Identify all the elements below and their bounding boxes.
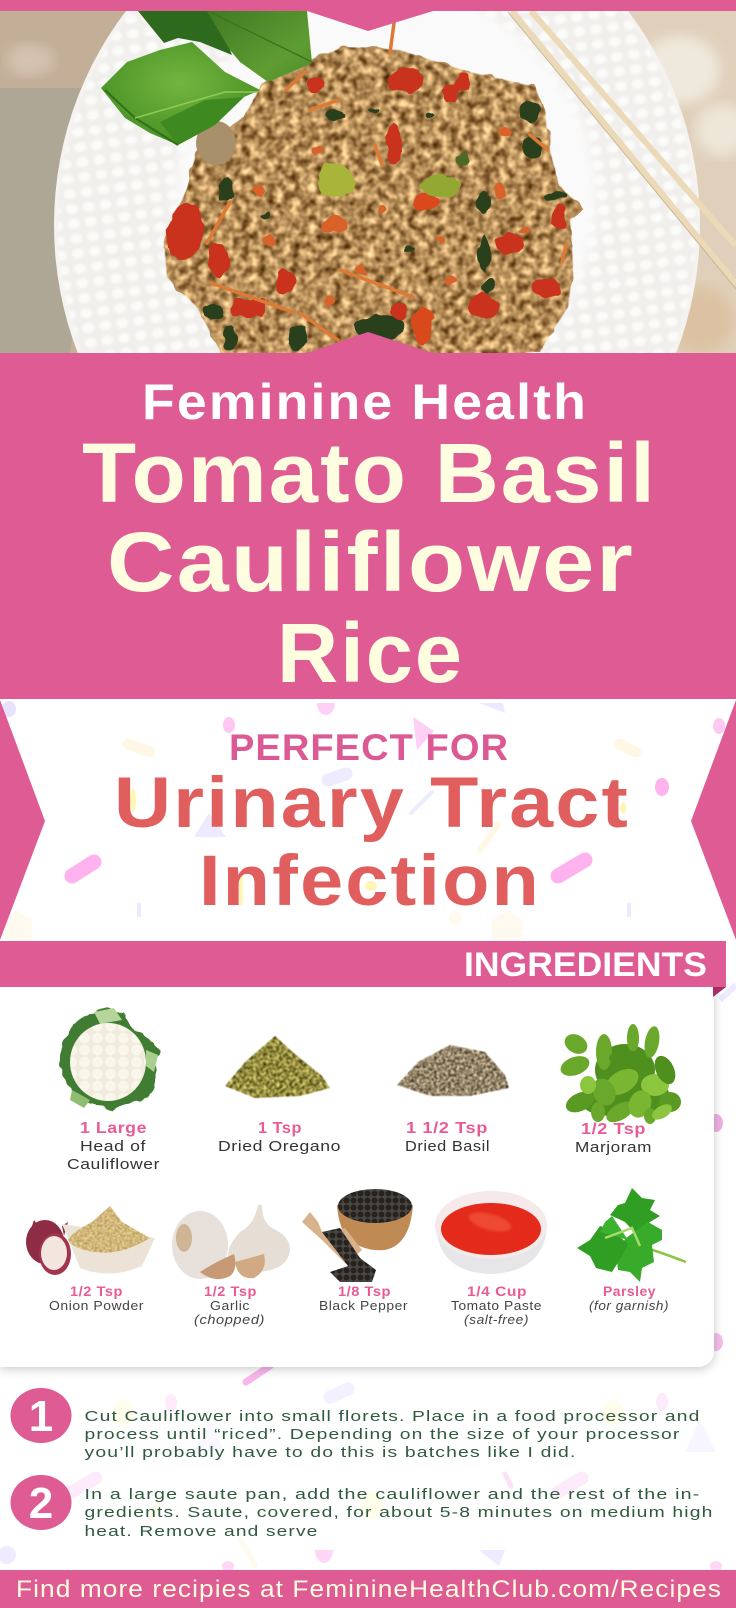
label: 1/2 Tsp marjoram	[575, 1121, 652, 1156]
confetti on right margin and lower section	[0, 985, 736, 1571]
ingredient: tomato paste	[435, 1191, 547, 1327]
banner heading: Urinary Tract Infection	[114, 764, 630, 921]
photo: tomato basil cauliflower rice on a white plate	[0, 11, 736, 353]
step 2 text	[84, 1486, 714, 1540]
ingredients header band	[0, 941, 726, 997]
right ribbon tail	[691, 700, 736, 940]
chopsticks	[508, 11, 736, 289]
heading: Ingredients: INGREDIENTS	[464, 946, 707, 984]
ingredients card	[0, 987, 714, 1367]
title: Tomato Basil Cauliflower Rice: Rice	[277, 606, 464, 700]
subtitle: Feminine Health: Feminine Health	[142, 374, 588, 430]
title: Tomato Basil Cauliflower Rice: Cauliflower	[107, 515, 635, 609]
icon: oregano pile	[225, 1036, 330, 1098]
label: 1 Large head of cauliflower	[67, 1120, 160, 1173]
step 2 text: In a large saute pan, add the cauliflower and the rest of the in-	[84, 1486, 700, 1503]
label: 1 1/2 Tsp dried basil	[405, 1120, 490, 1155]
title: Tomato Basil Cauliflower Rice: Tomato Basil	[82, 426, 657, 520]
label: 1/4 Cup tomato paste salt-free	[451, 1284, 542, 1327]
icon: cauliflower	[60, 1008, 158, 1112]
step 1	[10, 1388, 700, 1461]
footer text: Find more recipies at FeminineHealthClub.com/Recipes	[16, 1576, 722, 1603]
icon: garlic bulbs and cloves	[172, 1205, 290, 1279]
ingredient: dried oregano	[218, 1036, 341, 1155]
label: 1 Tsp dried oregano	[218, 1120, 341, 1155]
label: 1/2 Tsp garlic chopped: (chopped)	[194, 1313, 265, 1327]
label: 1 Tsp dried oregano: Dried Oregano	[218, 1138, 341, 1155]
ingredient: parsley	[577, 1188, 686, 1313]
rice mound	[161, 23, 582, 360]
label: 1/4 Cup tomato paste salt-free: Tomato Paste	[451, 1299, 542, 1313]
step 2 text: heat. Remove and serve	[84, 1523, 318, 1540]
label: 1/2 Tsp garlic chopped: 1/2 Tsp	[204, 1284, 257, 1299]
confetti background: upper section	[2, 701, 725, 940]
step 2 text: gredients. Saute, covered, for about 5-8 minutes on medium high	[84, 1504, 714, 1521]
label: 1 1/2 Tsp dried basil: Dried Basil	[405, 1138, 490, 1155]
basil leaves	[101, 11, 312, 145]
label: 1/2 Tsp onion powder: Onion Powder	[49, 1299, 144, 1313]
icon: parsley sprig	[577, 1188, 686, 1282]
step 1 text: you’ll probably have to do this is batches like I did.	[84, 1444, 576, 1461]
step 1 text: Cut Cauliflower into small florets. Place in a food processor and	[84, 1408, 700, 1425]
label: 1/2 Tsp garlic chopped: Garlic	[210, 1299, 250, 1313]
number badge 1: 1	[29, 1392, 53, 1441]
label: 1/8 Tsp black pepper: 1/8 Tsp	[338, 1284, 391, 1299]
label: 1/2 Tsp onion powder: 1/2 Tsp	[70, 1284, 123, 1299]
label: 1/2 Tsp marjoram: Marjoram	[575, 1139, 652, 1156]
number badge 1	[10, 1388, 72, 1443]
label: 1/4 Cup tomato paste salt-free: (salt-free)	[464, 1313, 529, 1327]
ingredient: marjoram	[558, 1024, 681, 1156]
footer band	[0, 1570, 736, 1608]
title panel	[0, 332, 736, 700]
label: 1 Large head of cauliflower: 1 Large	[80, 1120, 147, 1137]
icon: peppercorns in wooden bowl and scoop	[302, 1189, 413, 1282]
label: 1/8 Tsp black pepper: Black Pepper	[319, 1299, 408, 1313]
ingredient: dried basil	[397, 1045, 509, 1155]
label: Parsley for garnish	[589, 1284, 669, 1313]
icon: basil pile	[397, 1045, 509, 1096]
fold corner	[713, 987, 726, 997]
label: 1/4 Cup tomato paste salt-free: 1/4 Cup	[467, 1284, 527, 1299]
step 2	[10, 1475, 714, 1540]
number badge 2: 2	[29, 1479, 53, 1528]
icon: bowl of tomato paste	[435, 1191, 547, 1274]
banner heading: Perfect for: PERFECT FOR	[229, 727, 509, 768]
step 1 text	[84, 1408, 700, 1461]
label: 1/2 Tsp onion powder	[49, 1284, 144, 1313]
icon: marjoram sprigs	[558, 1024, 681, 1126]
label: 1/8 Tsp black pepper	[319, 1284, 408, 1313]
banner heading: Urinary Tract Infection: Urinary Tract	[114, 764, 630, 843]
ingredient: black pepper	[302, 1189, 413, 1313]
left ribbon tail	[0, 700, 45, 940]
banner heading: Urinary Tract Infection: Infection	[199, 842, 541, 921]
label: 1 1/2 Tsp dried basil: 1 1/2 Tsp	[406, 1120, 488, 1137]
label: Parsley for garnish: (for garnish)	[589, 1299, 669, 1313]
title: Tomato Basil Cauliflower Rice	[82, 426, 657, 700]
ingredient: garlic	[172, 1205, 290, 1327]
icon: onion and powder bowl	[26, 1206, 155, 1275]
label: 1 Large head of cauliflower: Head of	[80, 1138, 146, 1155]
label: 1 Tsp dried oregano: 1 Tsp	[258, 1120, 302, 1137]
ingredient: cauliflower	[60, 1008, 160, 1173]
top pink band with notch	[0, 0, 736, 31]
label: 1/2 Tsp marjoram: 1/2 Tsp	[581, 1121, 646, 1138]
number badge 2	[10, 1475, 72, 1530]
step 1 text: process until “riced”. Depending on the size of your processor	[84, 1426, 680, 1443]
ingredient: onion powder	[26, 1206, 155, 1313]
label: 1/2 Tsp garlic chopped	[194, 1284, 265, 1327]
label: Parsley for garnish: Parsley	[603, 1284, 656, 1299]
label: 1 Large head of cauliflower: Cauliflower	[67, 1156, 160, 1173]
